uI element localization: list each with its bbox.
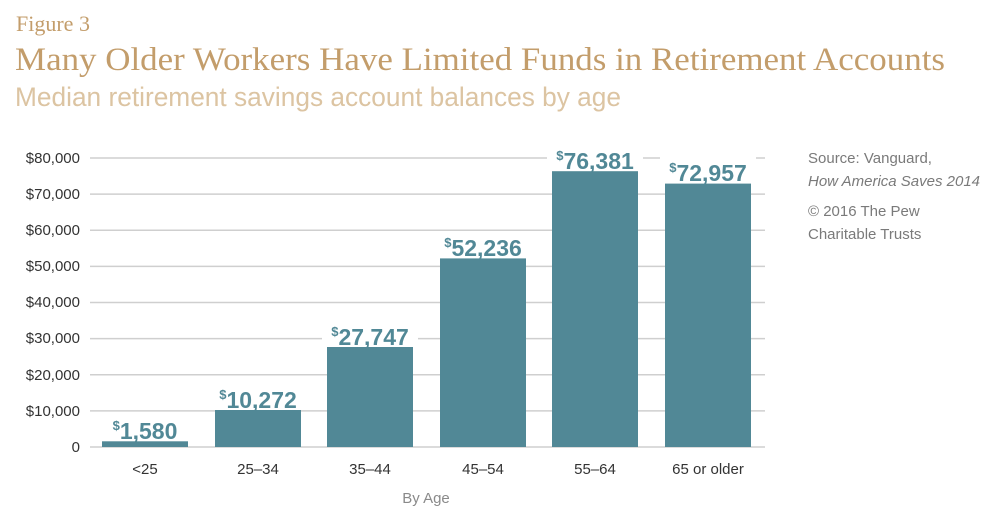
- x axis labels: 65 or older: [672, 461, 744, 478]
- value labels: 72,957: [676, 160, 747, 186]
- source note: Charitable Trusts: [808, 226, 921, 243]
- x axis title: By Age: [402, 490, 450, 507]
- figure label: Figure 3: [16, 11, 90, 36]
- value labels: $: [556, 148, 564, 163]
- y axis labels: $40,000: [26, 294, 80, 311]
- value labels: $: [113, 418, 121, 433]
- source note: Source: Vanguard,: [808, 150, 932, 167]
- x axis labels: 45–54: [462, 461, 504, 478]
- value labels: 52,236: [451, 235, 522, 261]
- source note: How America Saves 2014: [808, 173, 980, 190]
- y axis labels: $10,000: [26, 403, 80, 420]
- source note: [808, 150, 980, 243]
- value labels: [103, 144, 756, 444]
- y axis labels: $30,000: [26, 330, 80, 347]
- y axis labels: $70,000: [26, 186, 80, 203]
- title: Many Older Workers Have Limited Funds in Retirement Accounts: [15, 42, 945, 78]
- y axis labels: [26, 150, 80, 456]
- x axis labels: <25: [132, 461, 158, 478]
- value labels: $: [669, 160, 677, 175]
- value labels: $: [331, 324, 339, 339]
- x axis labels: 55–64: [574, 461, 616, 478]
- value labels: $: [444, 235, 452, 250]
- y axis labels: $20,000: [26, 367, 80, 384]
- value labels: 1,580: [120, 418, 177, 444]
- x axis labels: 35–44: [349, 461, 391, 478]
- y axis labels: $80,000: [26, 150, 80, 167]
- value labels: 76,381: [563, 148, 634, 174]
- value labels: $: [219, 387, 227, 402]
- value labels: 27,747: [338, 324, 409, 350]
- y axis labels: $50,000: [26, 258, 80, 275]
- value labels: 10,272: [226, 387, 297, 413]
- y axis labels: $60,000: [26, 222, 80, 239]
- y axis labels: 0: [72, 439, 80, 456]
- bar chart: [102, 171, 751, 447]
- source note: © 2016 The Pew: [808, 203, 920, 220]
- x axis labels: [132, 461, 744, 478]
- x axis labels: 25–34: [237, 461, 279, 478]
- subtitle: Median retirement savings account balances by age: [15, 82, 621, 112]
